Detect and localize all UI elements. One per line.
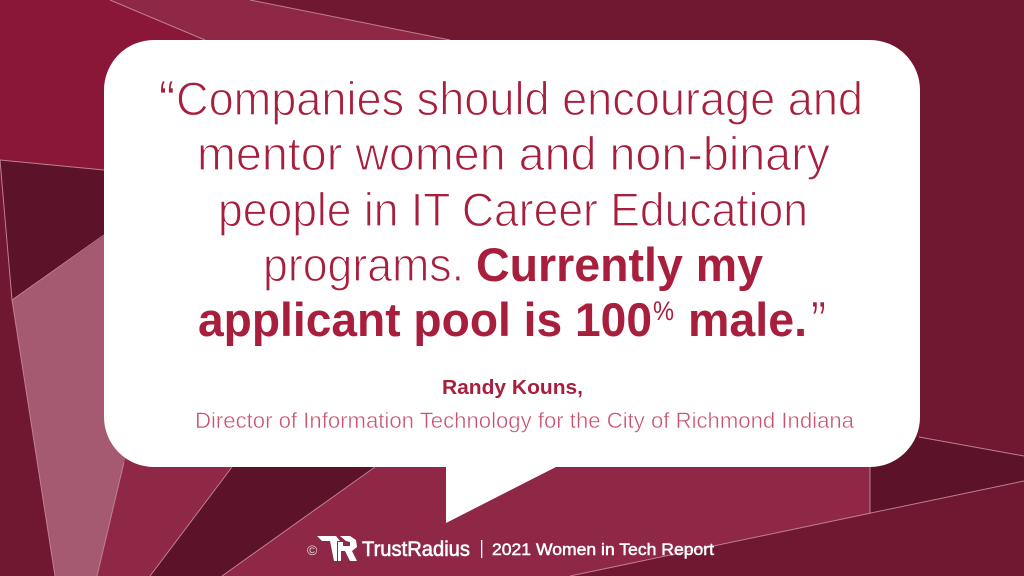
attribution name: Randy Kouns, <box>442 377 583 399</box>
copyright symbol: © <box>307 542 318 558</box>
speech bubble <box>104 40 920 523</box>
quote text: male. <box>688 293 807 346</box>
quote text: % <box>653 296 674 326</box>
quote text: “ <box>159 70 175 130</box>
report title: 2021 Women in Tech Report <box>492 540 714 559</box>
attribution title: Director of Information Technology for the City of Richmond Indiana <box>195 408 855 433</box>
footer <box>307 536 714 561</box>
quote text <box>159 70 863 351</box>
quote text: mentor women and non-binary <box>197 127 830 180</box>
quote text: Companies should encourage and <box>176 72 863 125</box>
icon: TrustRadius logo <box>317 536 357 561</box>
separator <box>481 540 482 558</box>
quote text: applicant pool is 100 <box>198 293 652 346</box>
quote text: people in IT Career Education <box>218 183 808 236</box>
quote text: programs. <box>263 238 464 291</box>
brand name: TrustRadius <box>362 538 470 561</box>
quote text: ” <box>811 291 826 351</box>
quote text: Currently my <box>476 238 763 291</box>
